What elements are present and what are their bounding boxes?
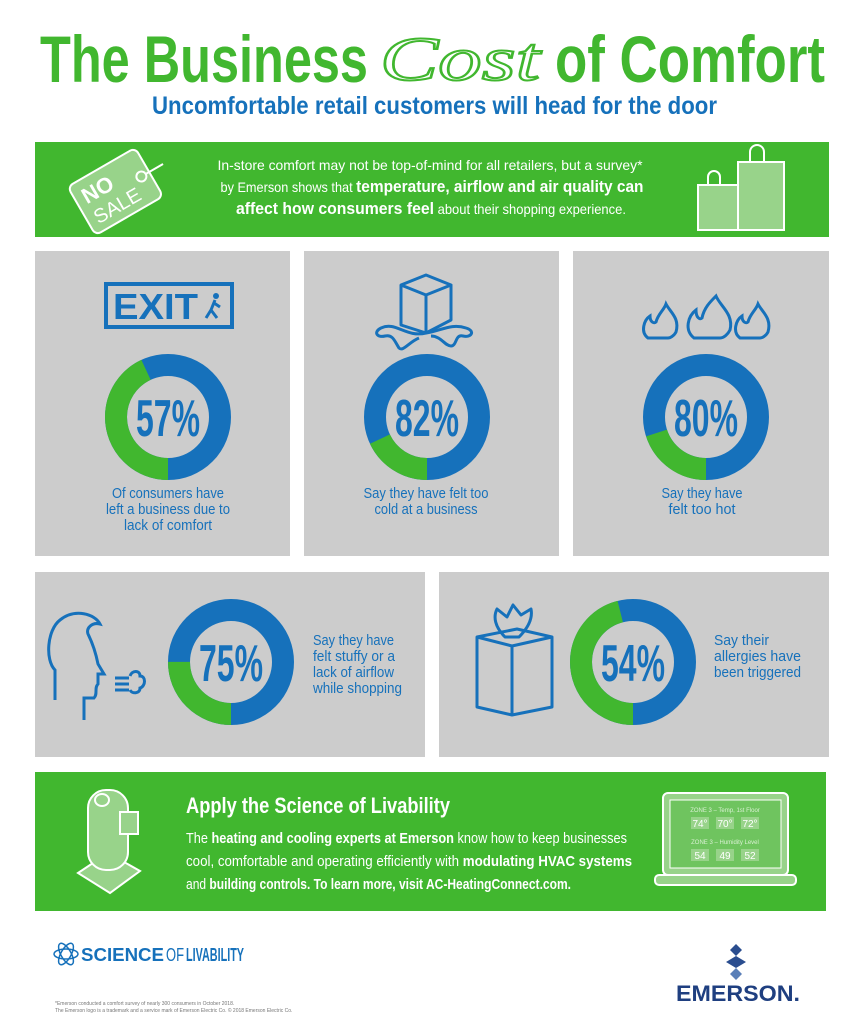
icon: exit sign: EXIT <box>113 286 198 327</box>
icon: no sale tag <box>68 140 177 235</box>
donut 54%: 54% <box>601 635 665 693</box>
panel: cold 82% <box>304 251 559 556</box>
icon: flames <box>644 296 769 338</box>
banner text: and building controls. To learn more, visit AC-HeatingConnect.com. <box>186 876 571 893</box>
icon: exit sign <box>106 284 232 327</box>
logo: science of livability: LIVABILITY <box>186 945 244 965</box>
icon: laptop thermostat: ZONE 3 – Humidity Level <box>691 840 759 846</box>
donut 57% <box>116 365 220 469</box>
banner text: cool, comfortable and operating efficiently with modulating HVAC systems <box>186 853 632 870</box>
title: Cost <box>380 26 542 94</box>
donut 75% <box>179 610 283 714</box>
icon: laptop thermostat: 49 <box>719 851 731 862</box>
donut 75%: 75% <box>199 635 263 693</box>
donut 82% <box>375 365 479 469</box>
logo: emerson: EMERSON. <box>676 981 800 1006</box>
icon: laptop thermostat: 52 <box>744 851 756 862</box>
footnote: *Emerson conducted a comfort survey of nearly 300 consumers in October 2018. <box>55 1001 234 1007</box>
caption 82: cold at a business <box>374 501 478 518</box>
donut 57%: 57% <box>136 390 200 448</box>
title <box>40 22 825 96</box>
caption 57: left a business due to <box>106 501 230 518</box>
panel: stuffy 75% <box>35 572 425 757</box>
panel: exit 57% <box>35 251 290 556</box>
donut 54% <box>581 610 685 714</box>
icon: laptop thermostat: ZONE 3 – Temp, 1st Floor <box>690 808 760 814</box>
panel: hot 80% <box>573 251 829 556</box>
caption 57: Of consumers have <box>112 485 224 502</box>
intro text <box>218 157 644 218</box>
intro text: In-store comfort may not be top-of-mind for all retailers, but a survey* <box>218 157 643 173</box>
icon: laptop thermostat: 72° <box>742 819 758 830</box>
banner heading: Apply the Science of Livability <box>186 793 451 818</box>
banner text: The heating and cooling experts at Emerson know how to keep businesses <box>186 830 627 847</box>
logo: science of livability: SCIENCE <box>81 945 164 965</box>
caption 80: felt too hot <box>668 501 736 518</box>
banner text <box>186 830 632 893</box>
panel: allergies 54% <box>439 572 829 757</box>
icon: compressor <box>78 790 140 893</box>
caption 54 <box>714 632 801 681</box>
caption 57: lack of comfort <box>124 517 213 534</box>
caption 75: while shopping <box>312 680 402 697</box>
caption 80: Say they have <box>662 485 742 502</box>
caption 54: Say their <box>714 632 769 649</box>
subtitle: Uncomfortable retail customers will head for the door <box>152 92 717 120</box>
logo: emerson <box>676 944 800 1006</box>
intro banner <box>35 140 829 237</box>
icon: laptop thermostat <box>655 793 796 885</box>
caption 75 <box>312 632 402 697</box>
intro text: by Emerson shows that temperature, airflow and air quality can <box>220 177 644 196</box>
caption 82 <box>364 485 488 518</box>
caption 75: felt stuffy or a <box>313 648 396 665</box>
donut 82%: 82% <box>395 390 459 448</box>
caption 82: Say they have felt too <box>364 485 488 502</box>
caption 80 <box>662 485 742 518</box>
icon: melting ice cube <box>377 275 472 349</box>
title: The Business <box>40 22 368 96</box>
caption 75: Say they have <box>313 632 394 649</box>
icon: person breathing <box>49 613 145 720</box>
caption 57 <box>106 485 230 534</box>
logo: science of livability: OF <box>166 945 184 965</box>
footnote <box>55 1001 292 1014</box>
icon: no sale tag: NO <box>77 171 118 209</box>
logo: science of livability <box>54 941 244 967</box>
caption 54: been triggered <box>714 664 801 681</box>
donut 80% <box>654 365 758 469</box>
icon: shopping bags <box>698 145 784 230</box>
icon: tissue box <box>477 605 552 715</box>
caption 54: allergies have <box>714 648 801 665</box>
icon: laptop thermostat: 54 <box>694 851 706 862</box>
icon: laptop thermostat: 70° <box>717 819 733 830</box>
donut 80%: 80% <box>674 390 738 448</box>
bottom banner <box>35 772 826 911</box>
intro text: affect how consumers feel about their shopping experience. <box>236 199 626 218</box>
caption 75: lack of airflow <box>313 664 394 681</box>
icon: laptop thermostat: 74° <box>692 819 708 830</box>
icon: no sale tag: SALE <box>90 184 145 229</box>
footnote: The Emerson logo is a trademark and a service mark of Emerson Electric Co. © 2018 Emerson Electric Co. <box>55 1007 292 1014</box>
